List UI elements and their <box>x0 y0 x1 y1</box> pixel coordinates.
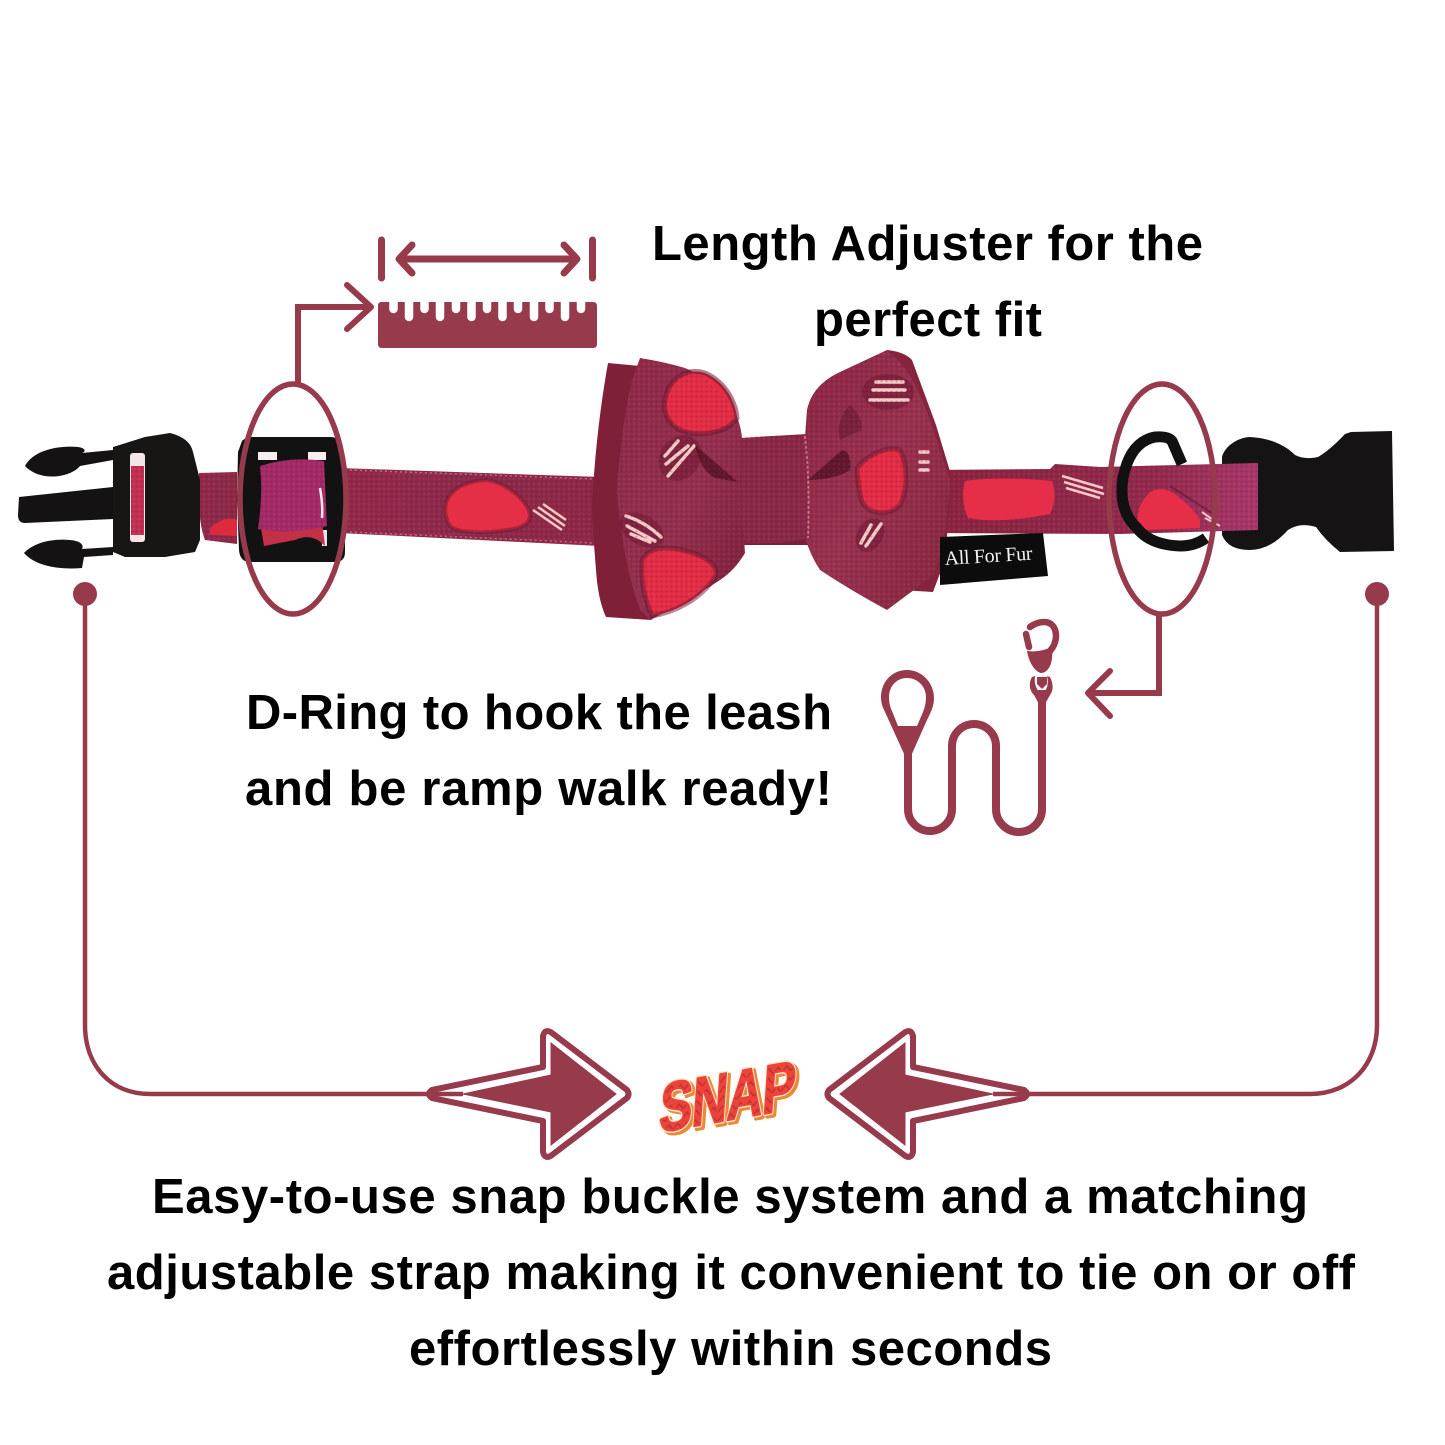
heading: D-ring: D-Ring to hook the leash <box>246 686 832 740</box>
bow tie: pink stripes <box>626 382 928 546</box>
heading: length adjuster <box>652 217 1203 347</box>
bow tie: fabric texture <box>617 350 950 620</box>
description text: effortlessly within seconds <box>409 1322 1052 1376</box>
bow tie: join behind knot <box>730 438 815 545</box>
arrow: pointing left to snap <box>828 1031 1027 1157</box>
length adjuster buckle with strap loop <box>237 437 345 562</box>
connector: right buckle to snap <box>993 582 1389 1094</box>
description text: adjustable strap making it convenient to tie on or off <box>107 1246 1356 1300</box>
bow tie: back left layer <box>592 363 680 620</box>
arrow: D-ring to leash <box>1088 613 1159 716</box>
bow tie: center knot <box>740 434 811 543</box>
icon: ruler with measure arrow <box>378 240 597 348</box>
collar strap: left section <box>199 468 600 546</box>
snap lettering: SNAP <box>657 1045 799 1147</box>
leash icon <box>881 622 1056 832</box>
D-ring <box>1122 437 1206 546</box>
collar strap: right section <box>930 431 1394 552</box>
brand label: All For Fur <box>944 543 1033 570</box>
bow tie: front left wing <box>617 358 745 620</box>
arrow: pointing right to snap <box>429 1031 628 1157</box>
bow tie: dark halos behind stripes <box>614 374 914 557</box>
callout ellipse: D-ring <box>1109 384 1215 614</box>
bow tie: front right wing <box>805 350 950 610</box>
bow tie: shadow folds <box>695 405 862 482</box>
arrow: adjuster to ruler <box>298 285 371 384</box>
callout ellipse: length adjuster <box>240 384 346 614</box>
heading: length adjuster: perfect fit <box>814 293 1042 347</box>
left snap buckle (insert side) <box>18 433 200 568</box>
bow tie <box>592 350 952 620</box>
bow tie: left wing heart bottom <box>642 548 716 616</box>
bow tie: right wing heart <box>857 449 906 513</box>
heading: D-ring: and be ramp walk ready! <box>245 762 832 816</box>
connector: left buckle to snap <box>73 582 463 1094</box>
heading: length adjuster: Length Adjuster for the <box>652 217 1203 271</box>
description text: Easy-to-use snap buckle system and a matching <box>152 1170 1308 1224</box>
description text <box>107 1170 1356 1376</box>
heading: D-ring <box>245 686 832 816</box>
snap lettering: SNAP <box>657 1045 799 1147</box>
bow tie: left wing heart top <box>664 371 737 434</box>
snap lettering: SNAP <box>660 1048 801 1149</box>
bow tie: back right layer <box>887 350 952 592</box>
brand label <box>940 533 1048 585</box>
